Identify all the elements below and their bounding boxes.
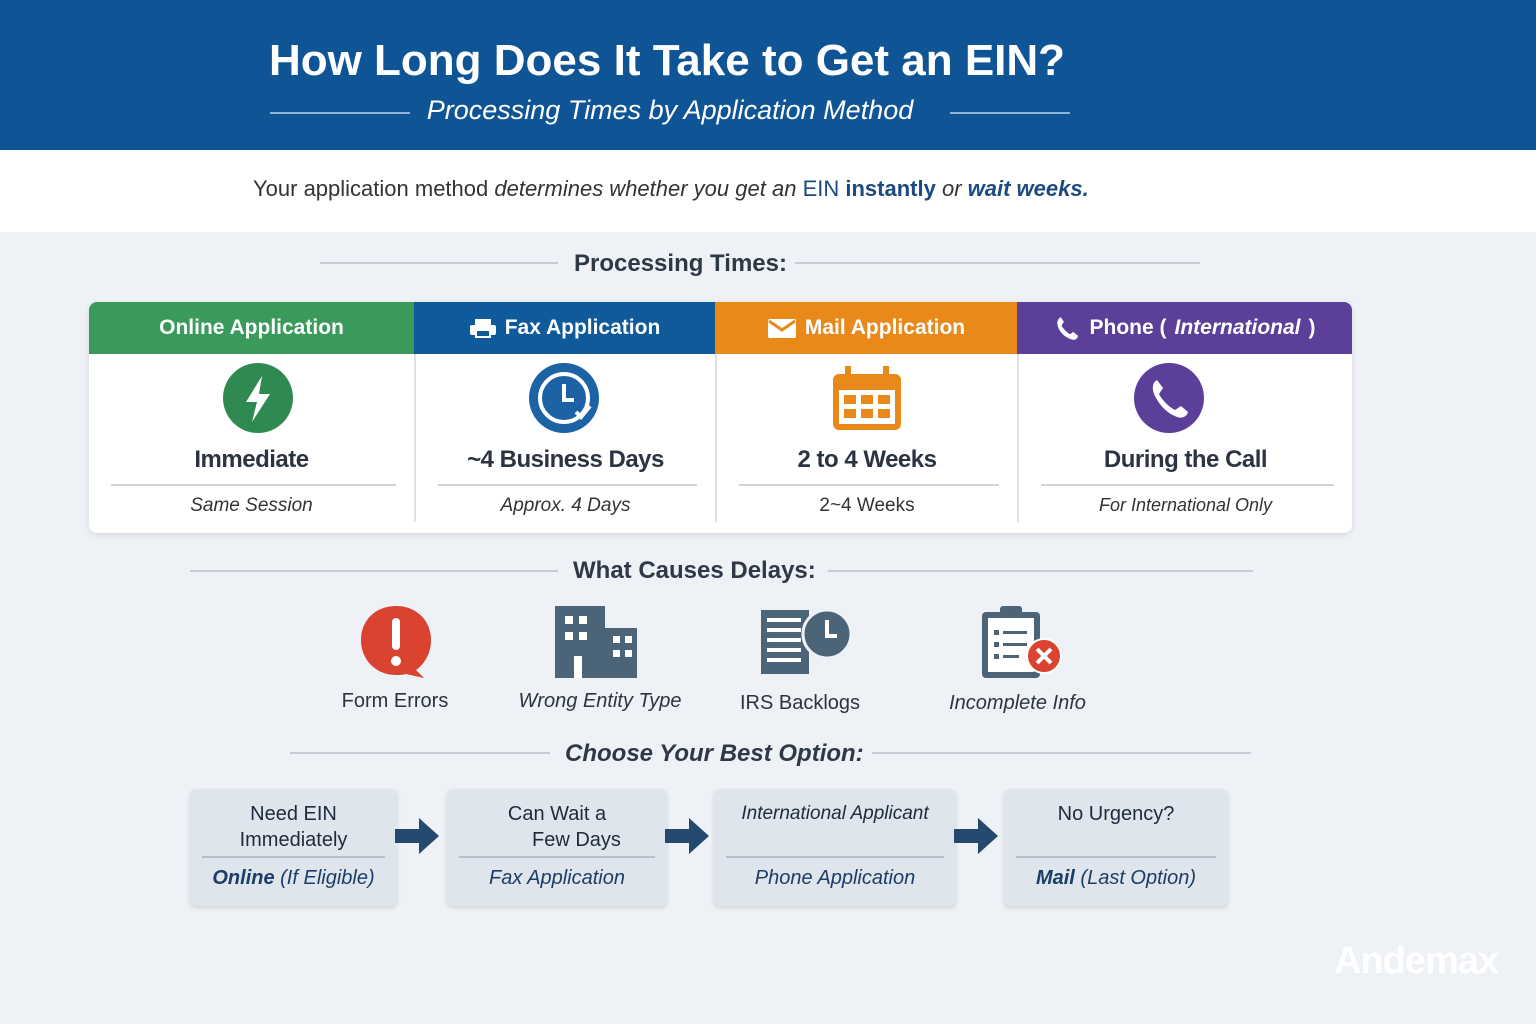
subtitle: Processing Times by Application Method	[427, 95, 913, 125]
option: international: International Applicant	[741, 803, 929, 824]
option: immediately: Immediately	[240, 829, 347, 851]
option: international: Phone Application	[755, 867, 915, 889]
title: How Long Does It Take to Get an EIN?	[269, 36, 1065, 85]
arrow 3	[954, 818, 998, 854]
heading: best option: Choose Your Best Option:	[565, 740, 864, 767]
column: mail	[715, 354, 1017, 522]
intro band	[0, 150, 1536, 232]
header band	[0, 0, 1536, 150]
option: immediately: Need EIN	[250, 803, 337, 825]
delay: irs backlogs: IRS Backlogs	[740, 692, 860, 714]
option: international	[714, 789, 956, 906]
column: mail: 2~4 Weeks	[819, 495, 915, 516]
header: phone: Phone ( )	[1089, 316, 1316, 339]
header: online	[89, 302, 414, 354]
column: online: Same Session	[190, 495, 313, 516]
delay: form errors: Form Errors	[342, 690, 448, 712]
icon: clock	[529, 363, 599, 433]
column: phone: During the Call	[1104, 446, 1267, 473]
option: no urgency: No Urgency?	[1058, 803, 1174, 825]
panel: processing times card	[89, 302, 1352, 533]
option: few days: Can Wait a	[508, 803, 606, 825]
icon: phone	[1134, 363, 1204, 433]
icon: lightning	[223, 363, 293, 433]
option: few days: Few Days	[532, 829, 621, 851]
watermark: Andemax	[1334, 940, 1498, 982]
heading: delays: What Causes Delays:	[573, 557, 816, 584]
column: online	[111, 363, 396, 516]
header: fax: Fax Application	[505, 316, 660, 339]
header: phone: International	[1174, 316, 1300, 339]
column: fax: Approx. 4 Days	[501, 495, 630, 516]
delay: incomplete info	[949, 606, 1086, 714]
delay: incomplete info: Incomplete Info	[949, 692, 1086, 714]
option: no urgency	[1004, 789, 1228, 906]
delay: irs backlogs	[740, 610, 860, 714]
column: fax	[414, 354, 715, 522]
column: mail: 2 to 4 Weeks	[798, 446, 936, 473]
heading: processing times: Processing Times:	[574, 250, 787, 277]
header: online: Online Application	[159, 316, 344, 339]
column: phone: For International Only	[1099, 495, 1272, 515]
option: few days	[447, 789, 667, 906]
icon: calendar	[833, 366, 901, 430]
header: mail: Mail Application	[805, 316, 965, 339]
delay: wrong entity type	[518, 606, 682, 712]
option: immediately	[190, 789, 397, 906]
option: no urgency: Mail (Last Option)	[1036, 867, 1196, 889]
header: mail	[715, 302, 1017, 354]
option: few days: Fax Application	[489, 867, 625, 889]
column: online: Immediate	[194, 446, 309, 473]
header: phone	[1017, 302, 1352, 354]
column: fax: ~4 Business Days	[467, 446, 664, 473]
option: immediately: Online (If Eligible)	[212, 867, 375, 889]
header: fax	[414, 302, 715, 354]
column: phone	[1017, 354, 1352, 522]
delay: wrong entity type: Wrong Entity Type	[518, 690, 682, 712]
delay: form errors	[342, 606, 448, 712]
arrow 2	[665, 818, 709, 854]
arrow 1	[395, 818, 439, 854]
intro text: Your application method determines whether you get an EIN instantly or wait weeks.	[253, 176, 1089, 201]
